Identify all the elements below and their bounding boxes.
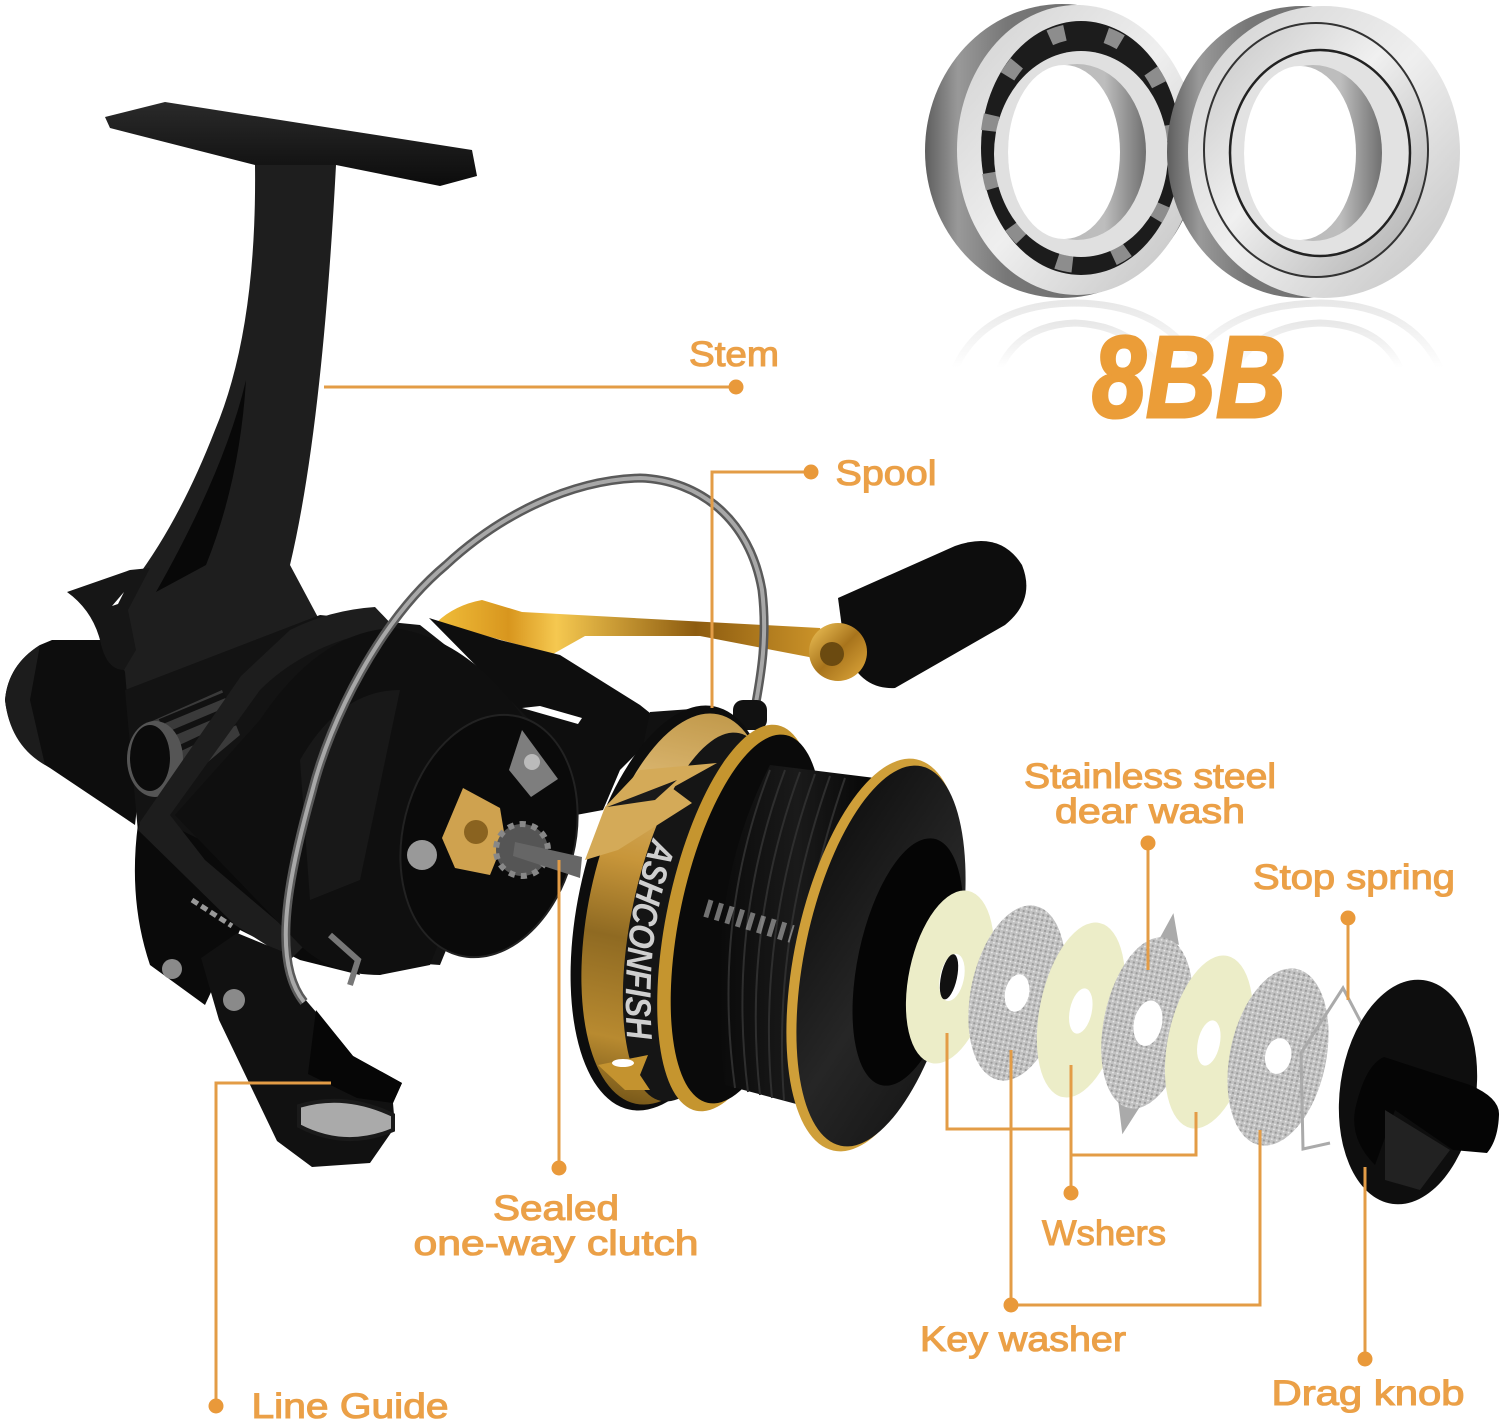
rotor arm — [429, 618, 665, 815]
brass nut — [442, 788, 505, 875]
reel foot — [105, 102, 477, 186]
label: Stem — [324, 335, 779, 394]
bail roller — [733, 700, 767, 730]
label: Drag knob: Drag knob — [1272, 1374, 1464, 1413]
stem lever — [67, 568, 150, 670]
spool skirt — [537, 687, 807, 1129]
bearing on bail — [299, 1101, 393, 1139]
label: Sealed one-way clutch: Sealed — [493, 1189, 619, 1228]
stop spring — [1301, 988, 1365, 1149]
label: Stainless steel dear wash: dear wash — [1055, 792, 1245, 831]
label: Line Guide — [208, 1083, 448, 1425]
spool bottom notch — [598, 1055, 650, 1090]
label: Drag knob — [1272, 1167, 1464, 1413]
spool barrel — [718, 765, 875, 1105]
handle knob — [838, 541, 1026, 688]
gear knob — [127, 690, 240, 798]
label: Sealed one-way clutch: one-way clutch — [414, 1224, 698, 1263]
spool gold ring — [628, 711, 846, 1125]
heading: 8BB: 8BB — [1092, 312, 1286, 442]
body backdrop — [125, 615, 540, 965]
rotor dome — [175, 628, 525, 975]
label: Stainless steel dear wash — [1024, 757, 1276, 970]
label: Key washer: Key washer — [920, 1320, 1126, 1359]
label: Line Guide: Line Guide — [252, 1387, 448, 1425]
metal washer 2 — [1212, 959, 1344, 1155]
screws — [223, 989, 245, 1011]
clutch gear and shaft — [496, 824, 548, 876]
label: Spool: Spool — [836, 454, 936, 493]
metal washer 1 — [954, 896, 1080, 1090]
rotor frame — [138, 607, 395, 960]
rotor face — [376, 696, 602, 976]
spool gold spikes — [585, 763, 717, 860]
spool rear hub — [640, 708, 705, 760]
spool brand band — [594, 719, 806, 1115]
label: Stop spring — [1253, 858, 1455, 1000]
felt washer 2 — [1022, 914, 1140, 1106]
label: Stainless steel dear wash: Stainless steel — [1024, 757, 1276, 796]
label: Spool — [712, 454, 936, 708]
handle arm — [437, 600, 835, 662]
felt washer 1 — [892, 882, 1008, 1072]
reel body — [5, 102, 1026, 1167]
key washer — [1081, 904, 1213, 1143]
rear drag cylinder — [5, 640, 150, 825]
label: Key washer — [920, 1050, 1260, 1359]
icon: bearing reflection — [955, 303, 1440, 368]
spool brand text: ASHCONFISH — [626, 837, 672, 1039]
label: Sealed one-way clutch — [414, 860, 698, 1263]
spool — [570, 700, 966, 1152]
label: Stem: Stem — [689, 335, 779, 374]
stem — [110, 165, 336, 730]
bail arm — [201, 933, 402, 1167]
bail wire — [286, 478, 764, 1002]
washers — [892, 882, 1344, 1155]
label: Wshers — [947, 1033, 1196, 1253]
icon: open ball bearing — [925, 4, 1199, 298]
label: Stop spring: Stop spring — [1253, 858, 1455, 897]
triangle plate — [509, 730, 558, 797]
drag knob — [1325, 971, 1499, 1213]
label: Wshers: Wshers — [1042, 1214, 1166, 1253]
spool front flange — [755, 743, 995, 1167]
lower shell — [135, 824, 360, 1005]
screw — [407, 840, 437, 870]
felt washer 3 — [1151, 947, 1267, 1137]
icon: shielded ball bearing — [1167, 6, 1460, 298]
